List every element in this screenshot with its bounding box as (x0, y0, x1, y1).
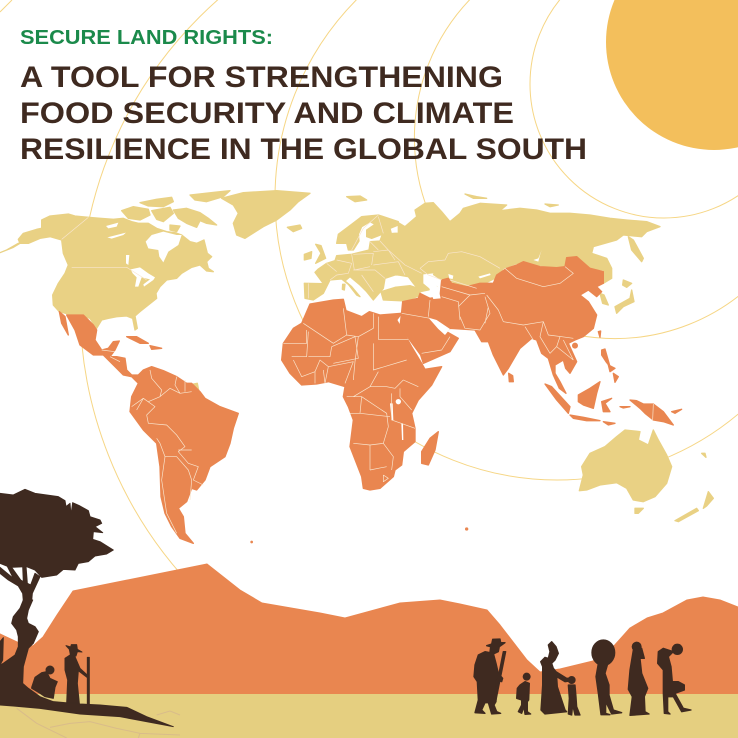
stump sliver (0, 638, 3, 665)
small child holding hand (568, 677, 580, 715)
woman with baby and headwrap (541, 642, 572, 714)
ground (0, 694, 738, 738)
title: A TOOL FOR STRENGTHENING (20, 61, 503, 94)
seated farmer (32, 666, 57, 698)
tree trunk with shadow (0, 600, 173, 727)
tree and two farmers (0, 489, 113, 601)
map: non-Global-South land (0, 191, 713, 522)
map: Global South land (59, 257, 682, 543)
woman carrying pot (628, 642, 649, 715)
title (20, 61, 587, 166)
tree trunk and farmers lower section (0, 600, 173, 727)
map: country borders (62, 215, 653, 533)
world map (0, 191, 713, 543)
tree canopy (0, 489, 113, 577)
man with hat, pack and staff (474, 639, 506, 714)
title: RESILIENCE IN THE GLOBAL SOUTH (20, 133, 587, 166)
standing farmer with staff (65, 645, 89, 704)
sun (606, 0, 738, 150)
person carrying load on head (592, 640, 622, 715)
title: FOOD SECURITY AND CLIMATE (20, 97, 514, 130)
map: inland water (106, 223, 542, 440)
child with pack (517, 673, 531, 714)
tree branches (0, 565, 40, 601)
bent person with pack and pot (658, 644, 691, 714)
group of walking people (474, 639, 691, 715)
mountains (0, 564, 738, 694)
subtitle: SECURE LAND RIGHTS: (20, 26, 273, 49)
